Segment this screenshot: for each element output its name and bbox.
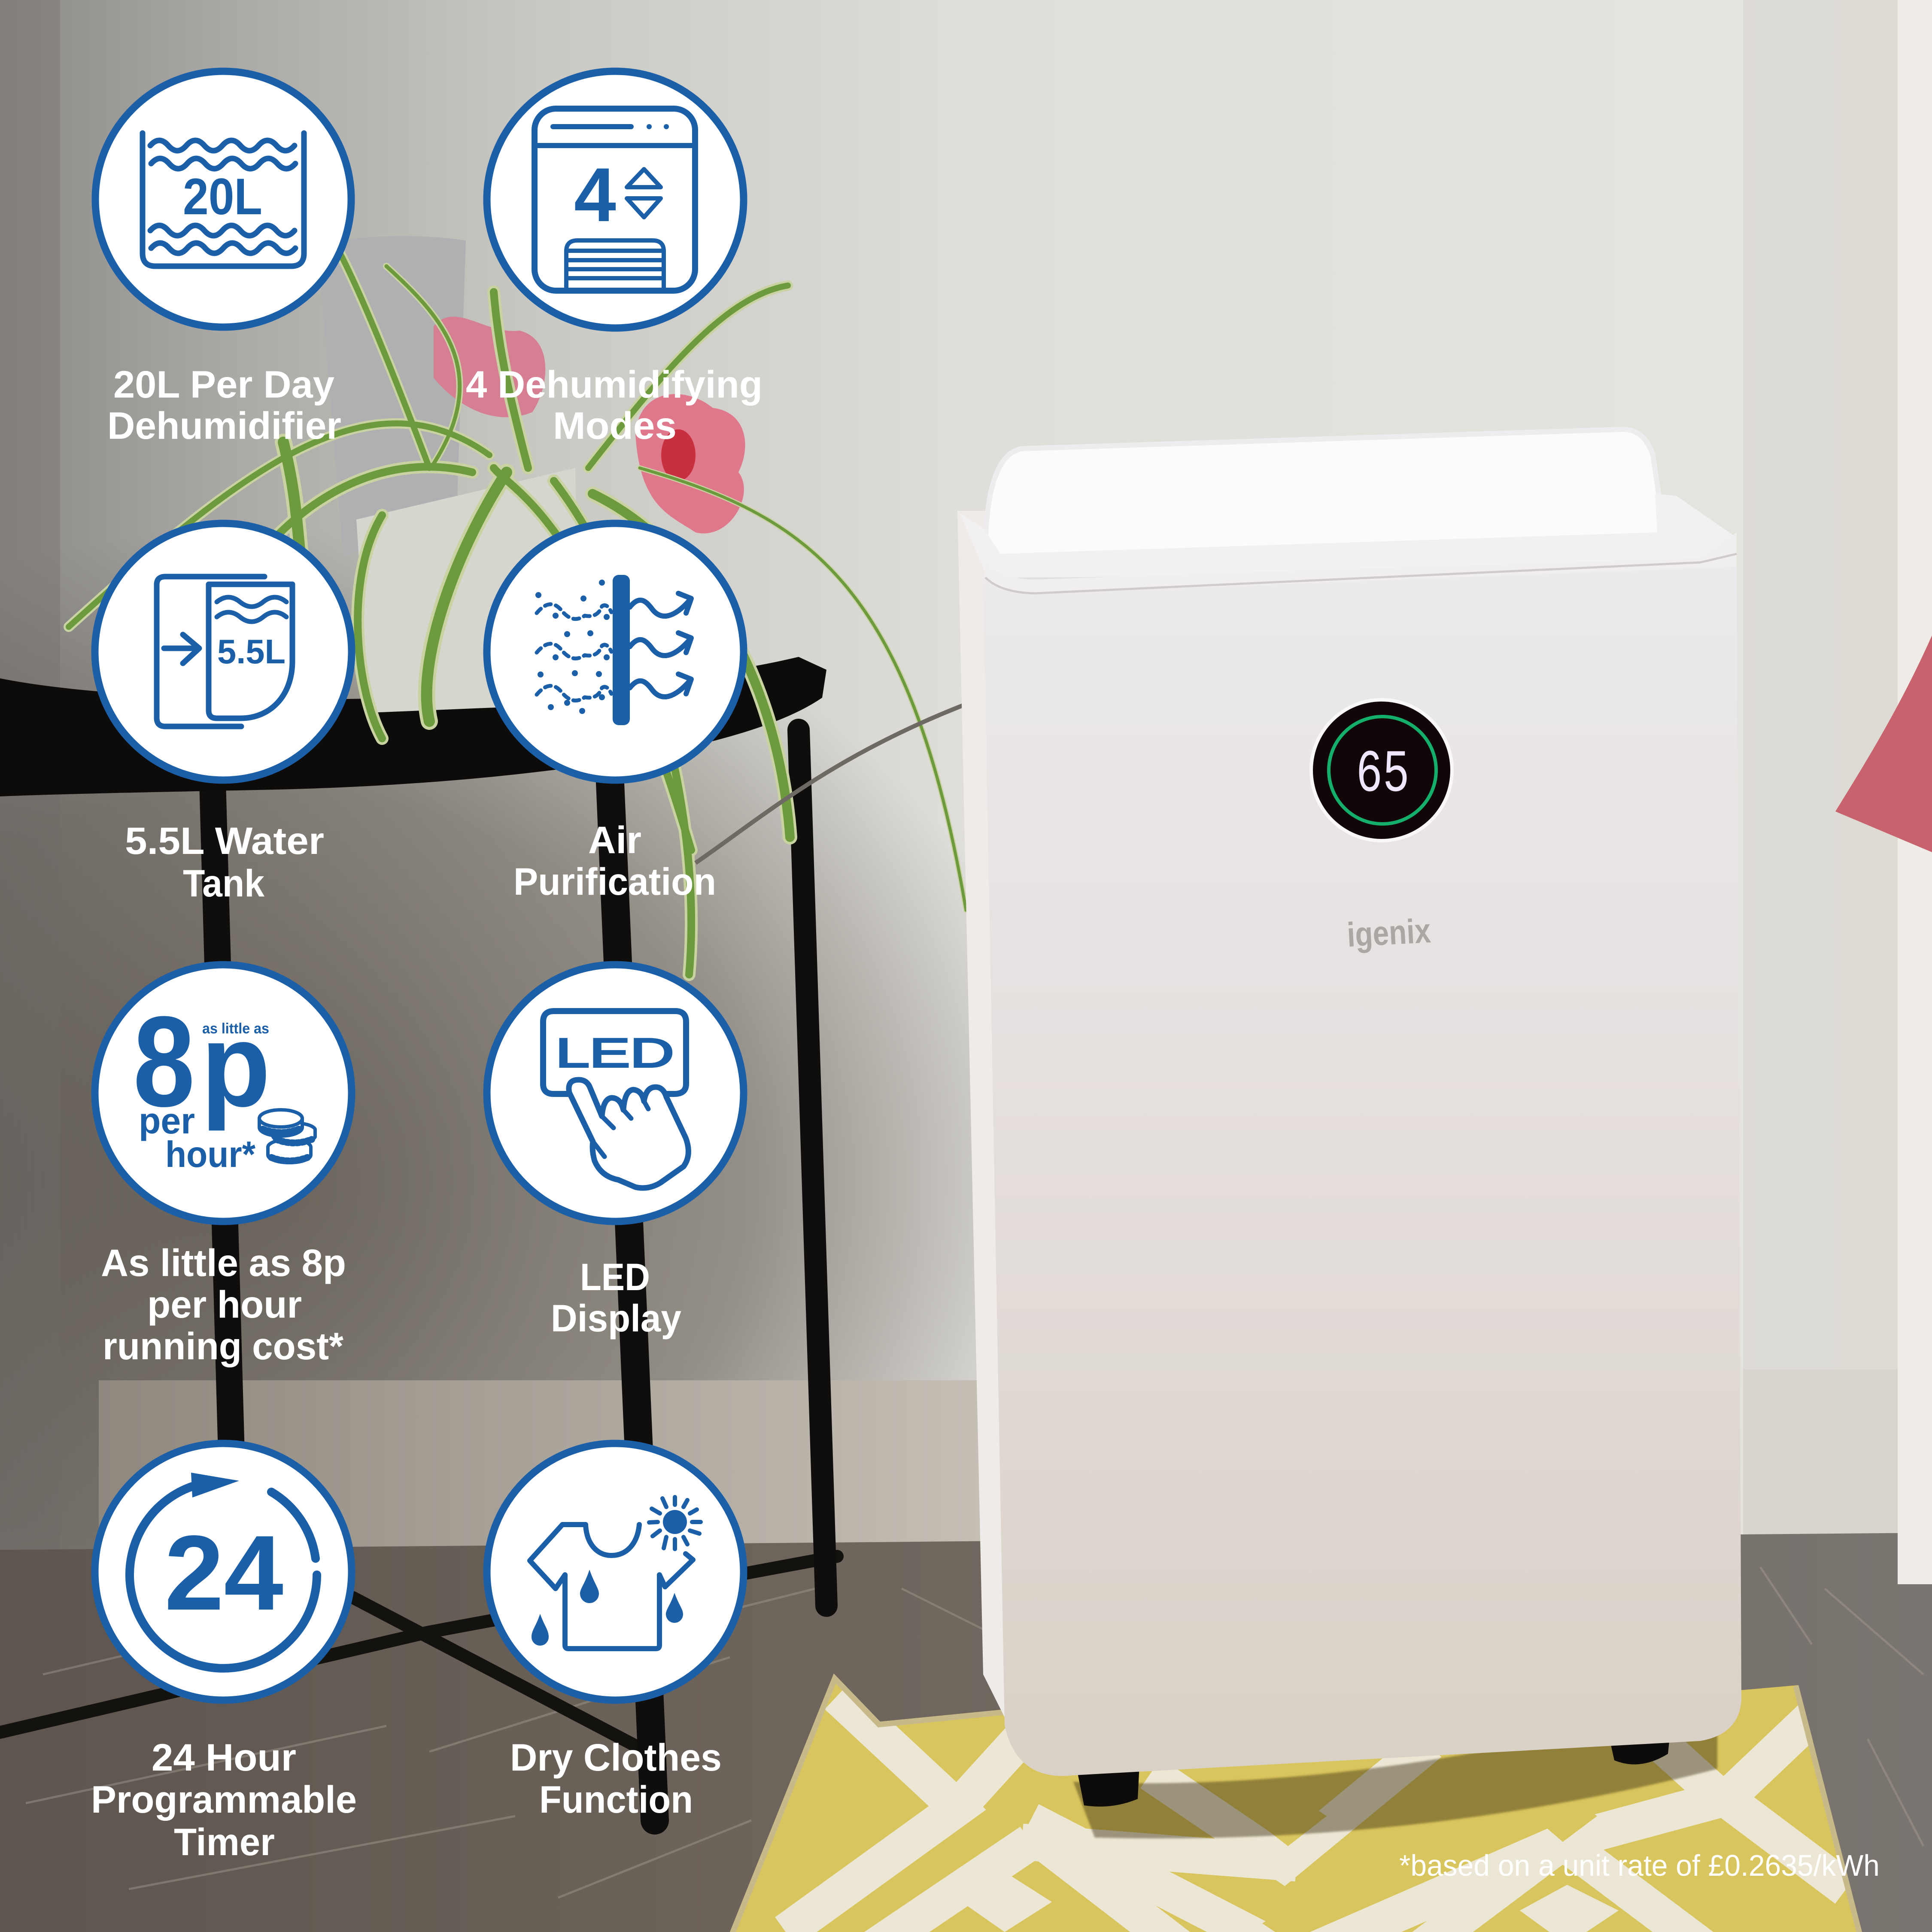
igenix logo: igenix: [1346, 911, 1432, 954]
label: [466, 363, 762, 447]
icon: 8p per hour coins: [133, 989, 315, 1175]
coin stack: [259, 1110, 315, 1163]
feature: 20L per day: [95, 71, 351, 447]
label: [107, 363, 341, 447]
icon: 8p per hour coins: per: [139, 1101, 195, 1142]
badge ring: [487, 71, 744, 328]
icon: control panel with 4 modes: 4: [574, 152, 616, 237]
side table: [0, 657, 837, 1820]
feature: dry clothes: [487, 1443, 744, 1821]
door frame right: [1898, 0, 1932, 1584]
dehumidifier: [957, 429, 1741, 1807]
feature: 24 hour timer: [91, 1443, 357, 1863]
label: Purification: [513, 860, 716, 903]
icon: removable water tank: [157, 577, 292, 726]
label: Function: [539, 1778, 693, 1821]
rear handle panel: [957, 511, 1005, 1717]
label: [513, 818, 716, 903]
label: Display: [551, 1297, 681, 1340]
label: 20L Per Day: [113, 363, 334, 406]
white plant pot: [356, 468, 580, 713]
badge ring: [487, 1443, 744, 1700]
badge ring: [95, 965, 352, 1221]
icon: LED panel and pointing hand: LED: [556, 1030, 674, 1076]
pink cloth: [1835, 635, 1932, 852]
icon: 8p per hour coins: hour*: [165, 1134, 255, 1175]
main body: [983, 567, 1741, 1776]
icon: control panel with 4 modes: [535, 109, 695, 291]
label: Modes: [553, 404, 677, 447]
badge ring: [95, 1443, 352, 1700]
footnote: *based on a unit rate of £0.2635/kWh: [1399, 1849, 1880, 1882]
label: running cost*: [103, 1324, 343, 1367]
skirting board: [99, 1370, 1898, 1552]
wooden floor: [0, 1533, 1932, 1932]
feature: 5.5L tank: [95, 523, 352, 905]
label: Dry Clothes: [510, 1736, 722, 1779]
label: Timer: [174, 1820, 275, 1863]
body seam line: [985, 554, 1737, 593]
label: [551, 1255, 681, 1340]
label: As little as 8p: [101, 1241, 346, 1284]
icon: 24 hour clock arrow: [130, 1473, 317, 1668]
control display: [1309, 698, 1454, 842]
label: 4 Dehumidifying: [466, 363, 762, 406]
label: 24 Hour: [152, 1736, 296, 1779]
box behind plant: [318, 236, 466, 558]
icon: 8p per hour coins: as little as: [202, 1021, 269, 1037]
badge ring: [487, 523, 744, 780]
label: Tank: [183, 862, 264, 905]
label: [125, 819, 324, 905]
back foot: [1608, 1719, 1671, 1765]
label: per hour: [147, 1283, 302, 1326]
label: Air: [588, 818, 641, 861]
sun: [649, 1497, 701, 1549]
icon: water tub 20L: 20L: [183, 168, 262, 225]
icon: 24 hour clock arrow: 24: [164, 1513, 283, 1632]
table legs: [213, 730, 826, 1820]
table tray: [0, 657, 826, 796]
feature: LED display: [487, 965, 744, 1340]
icon: 8p per hour coins: p: [201, 999, 270, 1132]
icon: LED panel and pointing hand: [543, 1011, 688, 1188]
label: Dehumidifier: [107, 404, 341, 447]
icon: water tub 20L: [143, 133, 304, 266]
power cable: [696, 698, 983, 863]
top collar: [960, 494, 1737, 577]
badge ring: [487, 965, 744, 1221]
feature: 8p per hour: [95, 965, 352, 1367]
label: [510, 1736, 722, 1821]
badge ring: [95, 71, 351, 327]
icon: removable water tank: 5.5L: [217, 632, 286, 671]
label: [101, 1241, 346, 1367]
humidity reading: 65: [1356, 741, 1410, 809]
pink flowers: [434, 316, 745, 533]
front foot: [1078, 1765, 1139, 1807]
badge ring: [95, 523, 352, 780]
label: 5.5L Water: [125, 819, 324, 862]
label: Programmable: [91, 1778, 357, 1821]
patterned yellow rug: [730, 1674, 1862, 1932]
label: [91, 1736, 357, 1863]
feature: air purification: [487, 523, 744, 903]
filter panel: [985, 429, 1668, 575]
cross bars: [0, 1556, 837, 1745]
spider plant leaves: [69, 240, 966, 975]
icon: 8p per hour coins: 8: [133, 989, 195, 1133]
feature: 4 modes: [466, 71, 762, 447]
icon: t-shirt, drops and sun: [530, 1497, 701, 1649]
icon: air filter: [535, 575, 691, 725]
label: LED: [580, 1255, 650, 1298]
